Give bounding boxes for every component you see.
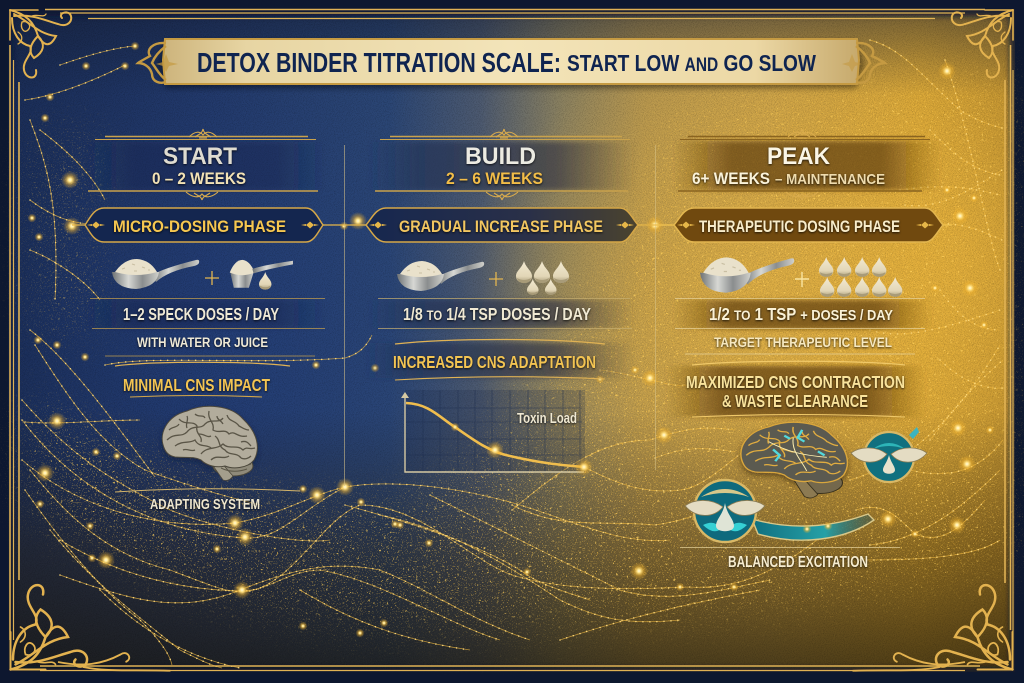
peak weeks: 6+ WEEKS <box>692 169 770 188</box>
start phase pill <box>72 208 345 242</box>
peak effect <box>686 372 905 411</box>
icon: flowing ribbon <box>752 514 874 540</box>
icon: activated brain <box>741 422 847 498</box>
peak heading: PEAK <box>767 143 831 170</box>
peak effect: & WASTE CLEARANCE <box>722 391 868 411</box>
start heading rules <box>88 129 318 200</box>
icon: grey brain <box>162 406 257 480</box>
title text: START LOW AND GO SLOW <box>567 50 838 76</box>
chart: toxin load curve <box>401 390 593 476</box>
build phase pill: GRADUAL INCREASE PHASE <box>399 218 603 236</box>
panel: peak <box>655 129 952 571</box>
panel: build <box>345 129 672 476</box>
peak phase pill <box>655 208 952 242</box>
start phase pill: MICRO-DOSING PHASE <box>113 218 286 236</box>
title text: DETOX BINDER TITRATION SCALE: <box>197 47 561 78</box>
peak weeks: – MAINTENANCE <box>775 171 885 188</box>
title banner <box>138 39 885 88</box>
vertical dividers <box>344 145 656 486</box>
build heading rules <box>375 129 630 200</box>
build heading: BUILD <box>465 143 536 170</box>
build effect: INCREASED CNS ADAPTATION <box>393 352 596 372</box>
start weeks: 0 – 2 WEEKS <box>152 169 246 188</box>
icon: spoon and drops <box>397 261 569 295</box>
start mixing note: WITH WATER OR JUICE <box>137 335 268 350</box>
peak weeks <box>692 169 885 188</box>
icon: left droplet badge <box>685 480 765 542</box>
build phase pill <box>345 208 672 242</box>
icon: large spoon and drops <box>700 257 902 297</box>
start system label: ADAPTING SYSTEM <box>150 496 260 513</box>
panel: start <box>72 129 345 513</box>
build dose: 1/8 TO 1/4 TSP DOSES / DAY <box>403 304 591 324</box>
peak dose: 1/2 TO 1 TSP + DOSES / DAY <box>709 304 893 324</box>
start dose: 1–2 SPECK DOSES / DAY <box>123 304 279 324</box>
start heading: START <box>163 143 237 170</box>
start effect: MINIMAL CNS IMPACT <box>123 375 270 395</box>
peak effect: MAXIMIZED CNS CONTRACTION <box>686 372 905 392</box>
icon: spoons and drop <box>112 259 293 290</box>
peak system label: BALANCED EXCITATION <box>728 554 868 571</box>
peak heading rules <box>678 129 930 200</box>
peak phase pill: THERAPEUTIC DOSING PHASE <box>699 218 900 236</box>
build weeks: 2 – 6 WEEKS <box>446 169 543 188</box>
peak target note: TARGET THERAPEUTIC LEVEL <box>714 335 892 350</box>
chart label: Toxin Load <box>517 410 577 427</box>
icon: right droplet badge <box>851 427 927 482</box>
